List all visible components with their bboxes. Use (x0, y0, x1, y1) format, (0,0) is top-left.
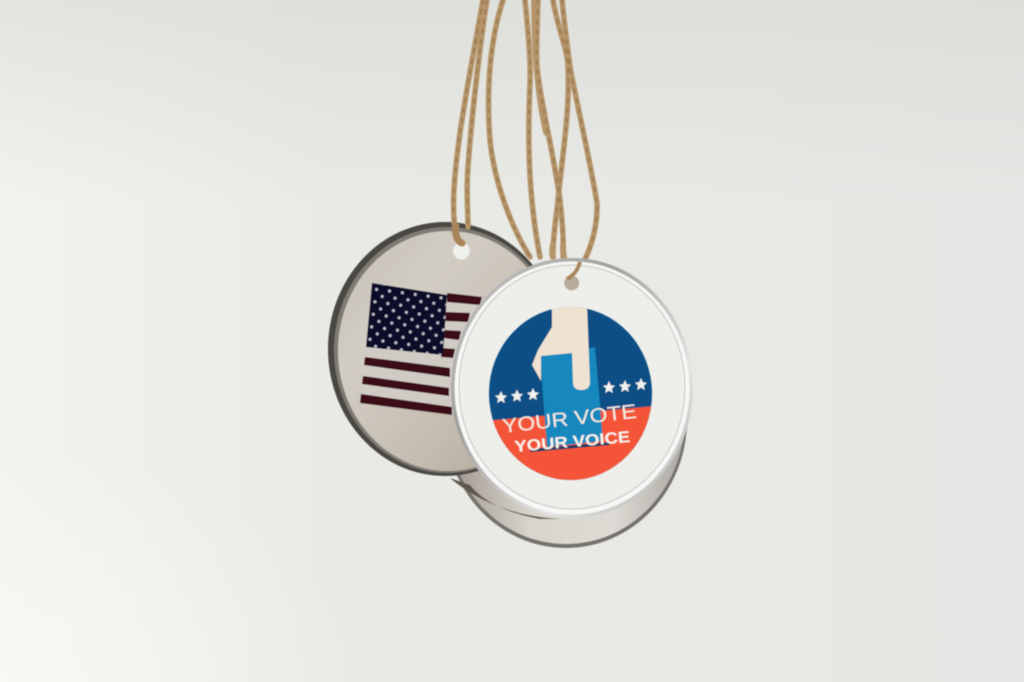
American flag (360, 283, 482, 415)
twine strings (454, 0, 597, 277)
knots at holes (455, 226, 462, 243)
ballot paper (540, 347, 603, 447)
slogan line 2: YOUR VOICE (514, 429, 631, 456)
slogan line 1: YOUR VOTE (501, 401, 638, 438)
stars (495, 378, 647, 403)
front badge (451, 258, 693, 518)
ballot shadow (530, 442, 610, 452)
hand (532, 305, 590, 390)
metal can behind badges (445, 290, 687, 548)
hole (453, 242, 470, 260)
badge rim and face (451, 258, 693, 518)
back badge: flag (328, 222, 562, 476)
logo: your vote your voice (485, 300, 655, 485)
